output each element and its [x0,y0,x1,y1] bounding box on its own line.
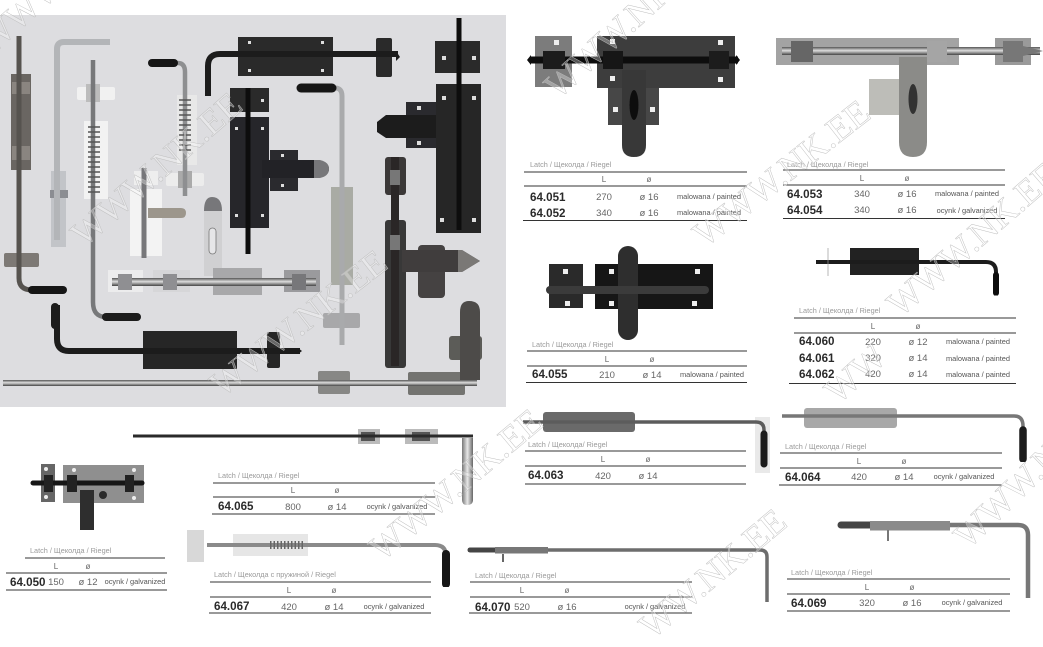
table: 64.060 / 64.061 / 64.062: malowana / painted [946,354,1010,363]
table: 64.051 / 64.052: ø 16 [639,192,659,203]
table: 64.051 / 64.052: L [602,175,607,184]
photo item: long spring bolt [77,60,137,317]
table: 64.053 / 64.054: malowana / painted [935,189,999,198]
table: 64.067: 420 [281,602,297,613]
table: 64.060 / 64.061 / 64.062: Latch / Щеколда / Riegel [799,306,881,315]
table: 64.070: L [520,586,525,595]
table: 64.070: ø 16 [557,602,577,613]
table: 64.060 / 64.061 / 64.062: ø 14 [908,369,928,380]
product image: 64.064 latch [782,408,1023,459]
photo item: silver L bolt [50,42,110,247]
watermarks: WWW.NK.EE: WW [817,336,894,411]
table: 64.069: Latch / Щеколда / Riegel [791,568,873,577]
table: 64.064: ø [902,457,907,466]
table: 64.070: ocynk / galvanized [625,602,685,611]
table: 64.060 / 64.061 / 64.062: ø 12 [908,337,928,348]
photo item: black top latch [208,37,400,96]
table: 64.067: ocynk / galvanized [364,602,424,611]
table: 64.053 / 64.054: ocynk / galvanized [937,206,997,215]
table: 64.064: L [857,457,862,466]
product image: 64.050 latch [33,464,144,530]
table: 64.060 / 64.061 / 64.062: L [871,322,876,331]
photo item: dark vertical latch, far left [4,36,63,290]
table: 64.055: Latch / Щеколда / Riegel [532,340,614,349]
table: 64.053 / 64.054: 340 [854,189,870,200]
product image: 64.069 latch [841,525,1028,598]
table: 64.060 / 64.061 / 64.062: malowana / painted [946,337,1010,346]
table: 64.050: ø [86,562,91,571]
table: 64.065: Latch / Щеколда / Riegel [218,471,300,480]
table: 64.064: 420 [851,472,867,483]
table: 64.050: ocynk / galvanized [105,577,165,586]
table: 64.060 / 64.061 / 64.062: 320 [865,353,881,364]
table: 64.055: 64.055 [532,368,568,381]
table: 64.053 / 64.054 [783,160,1005,218]
table: 64.065: ø [335,486,340,495]
table: 64.065: 64.065 [218,500,254,513]
product image: 64.051 latch [527,36,740,157]
product image: 64.063 latch [523,412,770,473]
table: 64.060 / 64.061 / 64.062 [789,306,1016,384]
photo item: black horizontal latch, bottom [55,305,302,369]
table: 64.070: 520 [514,602,530,613]
table: 64.070: 64.070 [475,601,510,614]
table: 64.051 / 64.052: 270 [596,192,612,203]
photo item: silver hasp plate [204,197,222,276]
table: 64.051 / 64.052: Latch / Щеколда / Riegel [530,160,612,169]
product image: 64.060 latch [816,248,996,293]
photo item: silver latch with black handle [301,88,360,345]
table: 64.050: ø 12 [78,577,98,588]
table: 64.051 / 64.052: malowana / painted [677,192,741,201]
table: 64.070: Latch / Щеколда / Riegel [475,571,557,580]
table: 64.053 / 64.054: ø 16 [897,205,917,216]
table: 64.063: L [601,455,606,464]
table: 64.064 [779,442,1002,485]
table: 64.060 / 64.061 / 64.062: 420 [865,369,881,380]
table: 64.051 / 64.052: ø 16 [639,208,659,219]
table: 64.050: L [54,562,59,571]
table: 64.067: 64.067 [214,600,249,613]
table: 64.060 / 64.061 / 64.062: 220 [865,337,881,348]
photo: assortment of latches [0,15,506,407]
watermarks: WWW.NK.EE: WWW.NK.EE [63,84,250,254]
table: 64.055: malowana / painted [680,370,744,379]
table: 64.069: 320 [859,598,875,609]
table: 64.065: ocynk / galvanized [367,502,427,511]
table: 64.053 / 64.054: 64.053 [787,188,823,201]
table: 64.053 / 64.054: ø [905,174,910,183]
table: 64.065: L [291,486,296,495]
photo item: black vertical latch with hasp [230,88,329,254]
watermarks: WWW.NK.EE: WWW.NK.EE [361,401,550,568]
table: 64.060 / 64.061 / 64.062: 64.060 [799,335,834,348]
table: 64.050: Latch / Щеколда / Riegel [30,546,112,555]
table: 64.064: Latch / Щеколда / Riegel [785,442,867,451]
product image: 64.065 long rod latch [133,429,473,505]
table: 64.063 [525,440,746,484]
table: 64.070: ø [565,586,570,595]
product image: 64.067 spring latch [187,530,446,584]
table: 64.053 / 64.054: 64.054 [787,204,823,217]
product image: 64.053 latch [776,38,1043,157]
table: 64.067 [209,570,431,613]
table: 64.055: L [605,355,610,364]
photo item: short spring bolt [152,63,204,196]
table: 64.065 [212,471,435,514]
photo item: horizontal silver bolt [108,268,320,295]
table: 64.067: ø [332,586,337,595]
table: 64.050: 150 [48,577,64,588]
table: 64.060 / 64.061 / 64.062: malowana / painted [946,370,1010,379]
photo item: small white latch [130,168,186,258]
table: 64.069: 64.069 [791,597,827,610]
table: 64.067: ø 14 [324,602,344,613]
table: 64.064: 64.064 [785,471,821,484]
photo item: black vertical latch, right [377,18,481,233]
table: 64.051 / 64.052: 64.051 [530,191,566,204]
photo item: dark vertical latch with hasp, lower right [385,157,480,368]
table: 64.067: Latch / Щеколда с пружиной / Riegel [214,570,336,579]
table: 64.051 / 64.052: ø [647,175,652,184]
table: 64.070 [469,571,692,614]
table: 64.050 [6,546,167,590]
table: 64.069 [787,568,1010,611]
table: 64.051 / 64.052: malowana / painted [677,208,741,217]
table: 64.060 / 64.061 / 64.062: 64.062 [799,368,834,381]
table: 64.051 / 64.052: 64.052 [530,207,565,220]
table: 64.065: 800 [285,502,301,513]
table: 64.053 / 64.054: ø 16 [897,189,917,200]
table: 64.060 / 64.061 / 64.062: ø [916,322,921,331]
table: 64.051 / 64.052 [523,160,747,220]
table: 64.055: ø 14 [642,370,662,381]
watermarks: WWW.NK.EE: WWW.NK.EE [202,242,394,404]
table: 64.069: ocynk / galvanized [942,598,1002,607]
table: 64.064: ø 14 [894,472,914,483]
table: 64.069: ø [910,583,915,592]
table: 64.055: ø [650,355,655,364]
table: 64.063: 64.063 [528,469,564,482]
table: 64.063: ø 14 [638,471,658,482]
table: 64.063: ø [646,455,651,464]
product image: 64.070 latch [468,550,767,602]
table: 64.063: Latch / Щеколда/ Riegel [528,440,608,449]
table: 64.063: 420 [595,471,611,482]
table: 64.069: ø 16 [902,598,922,609]
watermarks: WWW.NK.EE: WWW.NK.EE [685,92,877,254]
table: 64.060 / 64.061 / 64.062: ø 14 [908,353,928,364]
table: 64.053 / 64.054: L [860,174,865,183]
table: 64.065: ø 14 [327,502,347,513]
product image: 64.055 latch [549,246,713,340]
table: 64.055: 210 [599,370,615,381]
table: 64.050: 64.050 [10,576,45,589]
table: 64.069: L [865,583,870,592]
table: 64.064: ocynk / galvanized [934,472,994,481]
table: 64.060 / 64.061 / 64.062: 64.061 [799,352,835,365]
table: 64.051 / 64.052: 340 [596,208,612,219]
watermarks: WWW.NK.EE: WW.NK.EE [631,501,794,646]
table: 64.055 [526,340,747,382]
table: 64.053 / 64.054: Latch / Щеколда / Riegel [787,160,869,169]
photo item: long rod with hasp [3,301,482,395]
table: 64.067: L [287,586,292,595]
table: 64.053 / 64.054: 340 [854,205,870,216]
